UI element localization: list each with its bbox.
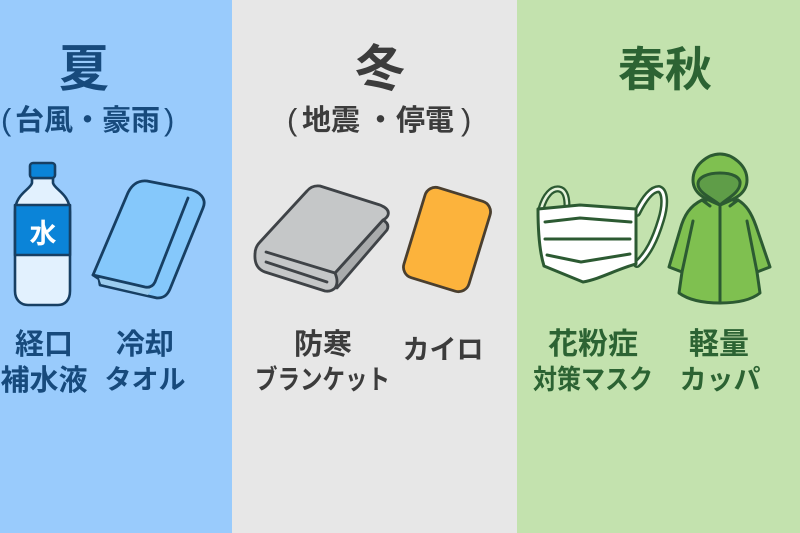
label: cold-weather blanket — [255, 328, 390, 395]
icon: light raincoat — [669, 154, 770, 303]
label: oral rehydration solution: 補水液 — [0, 364, 88, 397]
label: cooling towel: 冷却 — [116, 328, 174, 361]
icon: blanket — [255, 186, 388, 291]
icon: cooling towel — [93, 181, 204, 298]
label: pollen mask: 花粉症 — [548, 328, 638, 361]
icon: hand warmer — [401, 185, 493, 294]
label: light raincoat: カッパ — [680, 365, 760, 395]
subheading: earthquake and power outage: 地震・停電 — [302, 104, 454, 137]
heading: spring and autumn: 春秋 — [618, 43, 712, 96]
label: cold-weather blanket: ブランケット — [255, 364, 390, 395]
panel: spring and autumn — [517, 0, 800, 533]
panel: summer — [0, 0, 232, 533]
panel: winter — [232, 0, 517, 533]
heading: summer: 夏 — [59, 41, 109, 97]
label: pollen mask: 対策マスク — [533, 365, 653, 395]
subheading: typhoon and heavy rain: 台風・豪雨 — [15, 104, 160, 137]
subheading: typhoon and heavy rain: ( — [1, 102, 12, 137]
label: oral rehydration solution: 経口 — [15, 328, 73, 361]
label: cold-weather blanket: 防寒 — [294, 328, 352, 361]
label: pollen mask — [533, 328, 653, 395]
subheading: earthquake and power outage: ) — [461, 102, 471, 137]
subheading: earthquake and power outage: ( — [287, 102, 298, 137]
icon: pollen mask — [538, 189, 664, 282]
icon: water bottle: 水 — [30, 219, 56, 249]
icon: water bottle — [15, 163, 70, 305]
label: cooling towel: タオル — [104, 365, 186, 395]
label: hand warmer: カイロ — [402, 335, 484, 365]
heading: winter: 冬 — [355, 41, 405, 97]
subheading: typhoon and heavy rain: ) — [164, 102, 174, 137]
label: light raincoat: 軽量 — [689, 328, 749, 361]
